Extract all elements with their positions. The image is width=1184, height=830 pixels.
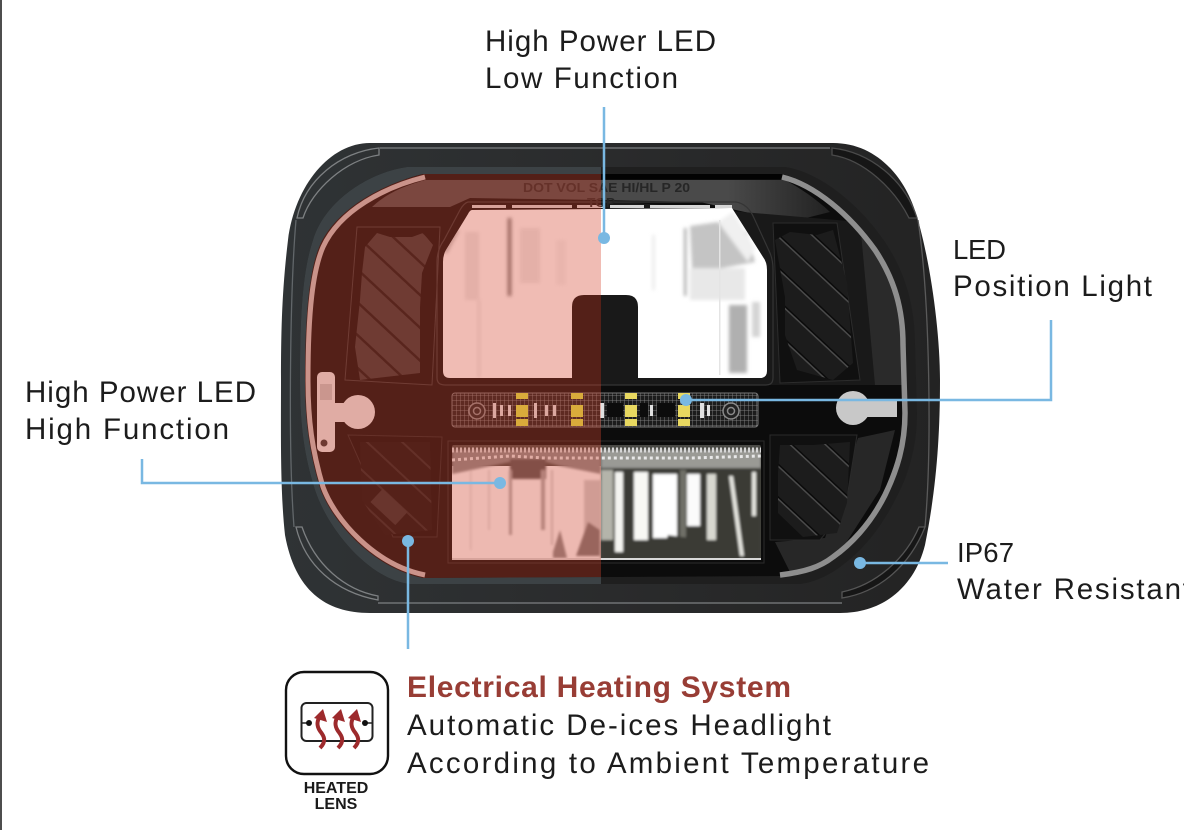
leader line [142, 459, 506, 489]
text: label: Low Function [485, 62, 678, 95]
text: DOT marking: DOT VOL SAE HI/HL P 20 [523, 180, 690, 195]
text: label: IP67 [957, 537, 1014, 568]
lower lens: high function [448, 441, 764, 563]
grey inner frame [300, 167, 917, 584]
top panel, left [372, 180, 601, 207]
text: icon caption: HEATED [304, 780, 368, 797]
interior detail [312, 174, 902, 572]
callout: high power LED low function [485, 25, 716, 244]
callout: high power LED high function [25, 376, 506, 489]
heading: Electrical Heating System [407, 671, 791, 704]
lens top serrated band [452, 448, 761, 452]
stripe pad upper right [770, 223, 860, 385]
text: TOP marking: TOP [587, 195, 615, 210]
lens top highlight [472, 205, 732, 208]
LED mounting bosses [469, 403, 739, 419]
leader line [854, 557, 948, 569]
text: label: High Power LED [25, 376, 256, 409]
textured side areas [862, 237, 902, 385]
mounting tab, left [317, 372, 375, 452]
seal strip, left [308, 177, 425, 575]
heat arrows [317, 715, 358, 748]
text: label [953, 234, 1152, 303]
top panel, right [601, 180, 830, 218]
LEDs [493, 393, 710, 426]
headlight illustration [281, 143, 940, 613]
callout: IP67 water resistant [854, 537, 1184, 606]
text: label [25, 376, 256, 446]
lens right side [601, 450, 761, 560]
housing outer shell [281, 143, 940, 613]
text: label: LED [953, 234, 1006, 265]
stripe pad lower left [348, 435, 442, 542]
stripe pad upper left [345, 225, 440, 385]
icon: heated lens [286, 672, 388, 813]
lens left side [452, 466, 601, 560]
recessed interior [305, 174, 907, 578]
text: label: Water Resistant [957, 573, 1184, 606]
heating system description [407, 671, 929, 780]
callout: LED position light [680, 234, 1152, 406]
text: label: High Power LED [485, 25, 716, 58]
mounting tab, right [836, 391, 897, 425]
body text [407, 709, 929, 780]
page edge line [0, 0, 2, 830]
body text: According to Ambient Temperature [407, 747, 929, 780]
text: label [485, 25, 716, 95]
moulded markings [523, 180, 690, 210]
housing trim lines [290, 148, 929, 603]
LED position light strip [452, 393, 758, 427]
leader line: heating system [402, 535, 414, 649]
text: label: High Function [25, 413, 229, 446]
stripe pad lower right [770, 435, 857, 540]
text: label: Position Light [953, 270, 1152, 303]
leader line [598, 107, 610, 244]
icon: heated lens: LENS [315, 796, 358, 813]
text: label [957, 537, 1184, 606]
body text: Automatic De-ices Headlight [407, 709, 831, 742]
heated lens red overlay [300, 170, 601, 582]
silver seal strip, right [780, 177, 905, 575]
upper lens: low function [437, 202, 773, 385]
leader line [680, 320, 1051, 406]
